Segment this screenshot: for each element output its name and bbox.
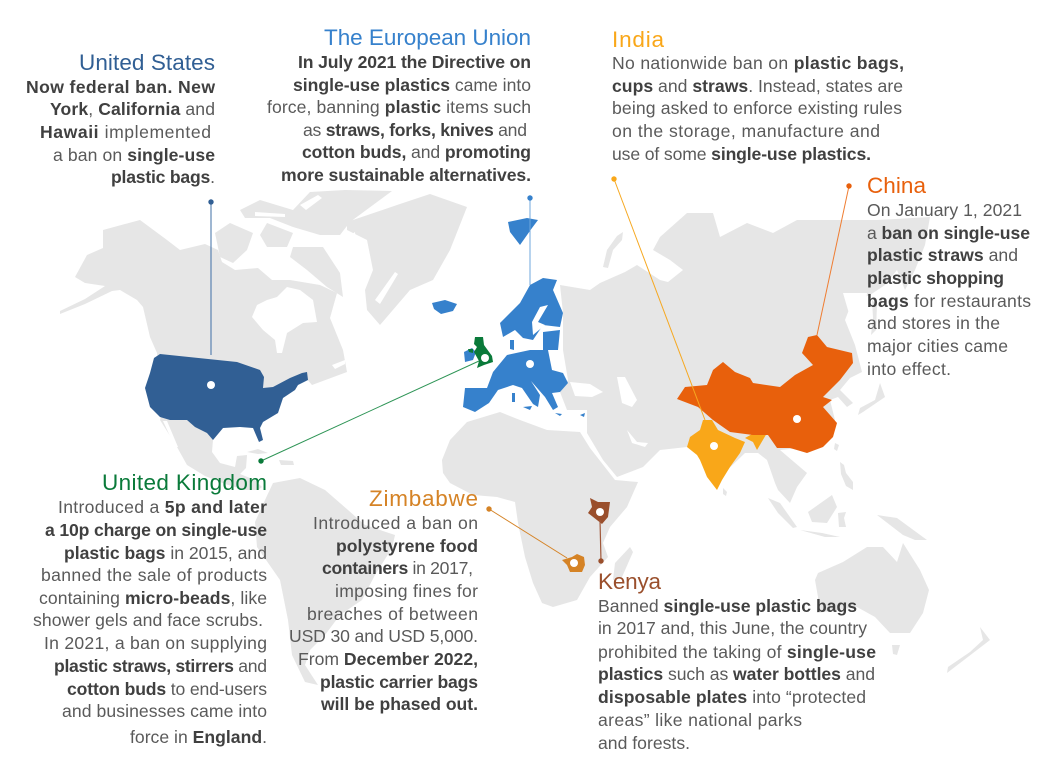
heading: India: India xyxy=(612,27,664,52)
text block: United Kingdom: a 10p charge on single-use xyxy=(45,520,267,540)
text block: United States: Now federal ban. New xyxy=(26,77,215,97)
text block: China: On January 1, 2021 xyxy=(867,200,1022,220)
text block: Kenya: disposable plates into “protected xyxy=(598,687,866,707)
text block: Zimbabwe: Introduced a ban on xyxy=(313,513,478,533)
text block: Kenya: in 2017 and, this June, the country xyxy=(598,618,867,638)
panel: The European Union xyxy=(267,25,531,185)
panel: Zimbabwe xyxy=(289,486,478,714)
text block: United Kingdom: force in England. xyxy=(130,727,267,747)
text block: China: plastic shopping xyxy=(867,268,1004,288)
country: India xyxy=(687,420,767,490)
text block: China xyxy=(867,200,1031,379)
text block: European Union: force, banning plastic items such xyxy=(267,97,531,117)
text block: United States: a ban on single-use xyxy=(53,145,215,165)
text block: Zimbabwe: breaches of between xyxy=(307,604,478,624)
callout line: United Kingdom xyxy=(258,354,489,464)
text block: China: bags for restaurants xyxy=(867,291,1031,311)
text block: China: major cities came xyxy=(867,336,1008,356)
callout line: Kenya xyxy=(596,508,604,564)
text block: China: into effect. xyxy=(867,359,951,379)
text block: Zimbabwe: containers in 2017, xyxy=(322,558,473,578)
heading: Zimbabwe: Zimbabwe xyxy=(369,486,478,511)
heading: China: China xyxy=(867,173,926,198)
text block: United Kingdom: plastic bags in 2015, and xyxy=(64,543,267,563)
heading: The European Union: The European Union xyxy=(324,25,531,50)
text block: European Union: single-use plastics came into xyxy=(293,75,531,95)
country: United Kingdom xyxy=(468,337,493,368)
country: Zimbabwe xyxy=(562,554,585,572)
text block: Kenya: areas” like national parks xyxy=(598,710,802,730)
text block: China: a ban on single-use xyxy=(867,223,1030,243)
text block: United Kingdom: plastic straws, stirrers and xyxy=(54,656,267,676)
text block: United Kingdom: containing micro-beads, like xyxy=(39,588,267,608)
text block: Kenya xyxy=(598,596,876,753)
heading: Kenya: Kenya xyxy=(598,569,661,594)
heading: United Kingdom: United Kingdom xyxy=(102,470,267,495)
panel: China xyxy=(867,173,1031,379)
text block: Kenya: and forests. xyxy=(598,733,690,753)
text block: United Kingdom: Introduced a 5p and later xyxy=(58,497,267,517)
world map xyxy=(60,190,990,685)
callout line: United States xyxy=(207,199,215,389)
text block: European Union xyxy=(267,52,531,185)
panel: United Kingdom xyxy=(33,470,267,747)
text block: China: and stores in the xyxy=(867,313,1000,333)
text block: United Kingdom: In 2021, a ban on supplying xyxy=(44,633,267,653)
text block: India: cups and straws. Instead, states are xyxy=(612,76,903,96)
text block: European Union: as straws, forks, knives and xyxy=(303,120,527,140)
text block: Zimbabwe: USD 30 and USD 5,000. xyxy=(289,626,478,646)
text block: United Kingdom: banned the sale of products xyxy=(41,565,267,585)
countries: European Union xyxy=(432,218,585,417)
text block: United States: Hawaii implemented xyxy=(40,122,211,142)
white water bodies xyxy=(163,195,867,447)
text block: India: being asked to enforce existing rules xyxy=(612,98,902,118)
country: China xyxy=(677,335,853,453)
text block: United Kingdom: cotton buds to end-users xyxy=(67,679,267,699)
text block: China: plastic straws and xyxy=(867,245,1018,265)
text block: European Union: In July 2021 the Directive on xyxy=(298,52,531,72)
callout line: European Union xyxy=(526,195,534,368)
text block: European Union: cotton buds, and promoting xyxy=(302,142,531,162)
heading: United States: United States xyxy=(79,50,215,75)
panel: India xyxy=(612,27,904,164)
text block: Zimbabwe: plastic carrier bags xyxy=(320,672,478,692)
text block: United Kingdom: shower gels and face scrubs. xyxy=(33,610,263,630)
text block: India: use of some single-use plastics. xyxy=(612,144,871,164)
text block: United Kingdom xyxy=(33,497,267,747)
text block: Zimbabwe xyxy=(289,513,478,714)
panel: United States xyxy=(26,50,215,187)
text block: India xyxy=(612,53,904,164)
country: Kenya xyxy=(588,498,610,524)
grey landmasses xyxy=(60,190,990,685)
text block: Kenya: plastics such as water bottles and xyxy=(598,664,875,684)
text block: European Union: more sustainable alternatives. xyxy=(281,165,531,185)
callout line: Zimbabwe xyxy=(486,506,578,567)
text block: Zimbabwe: From December 2022, xyxy=(298,649,478,669)
text block: Zimbabwe: imposing fines for xyxy=(335,581,478,601)
text block: United States: plastic bags. xyxy=(111,167,215,187)
callout line: India xyxy=(611,176,718,450)
country: United States xyxy=(145,354,308,442)
text block: Zimbabwe: will be phased out. xyxy=(320,694,478,714)
panel: Kenya xyxy=(598,569,876,753)
text block: United States: York, California and xyxy=(50,99,215,119)
text block: India: on the storage, manufacture and xyxy=(612,121,880,141)
text block: India: No nationwide ban on plastic bags, xyxy=(612,53,904,73)
text block: Kenya: Banned single-use plastic bags xyxy=(598,596,857,616)
callout line: China xyxy=(793,183,852,423)
text block: Zimbabwe: polystyrene food xyxy=(336,536,478,556)
text block: Kenya: prohibited the taking of single-use xyxy=(598,642,876,662)
text block: United Kingdom: and businesses came into xyxy=(62,701,267,721)
text block: United States xyxy=(26,77,215,187)
